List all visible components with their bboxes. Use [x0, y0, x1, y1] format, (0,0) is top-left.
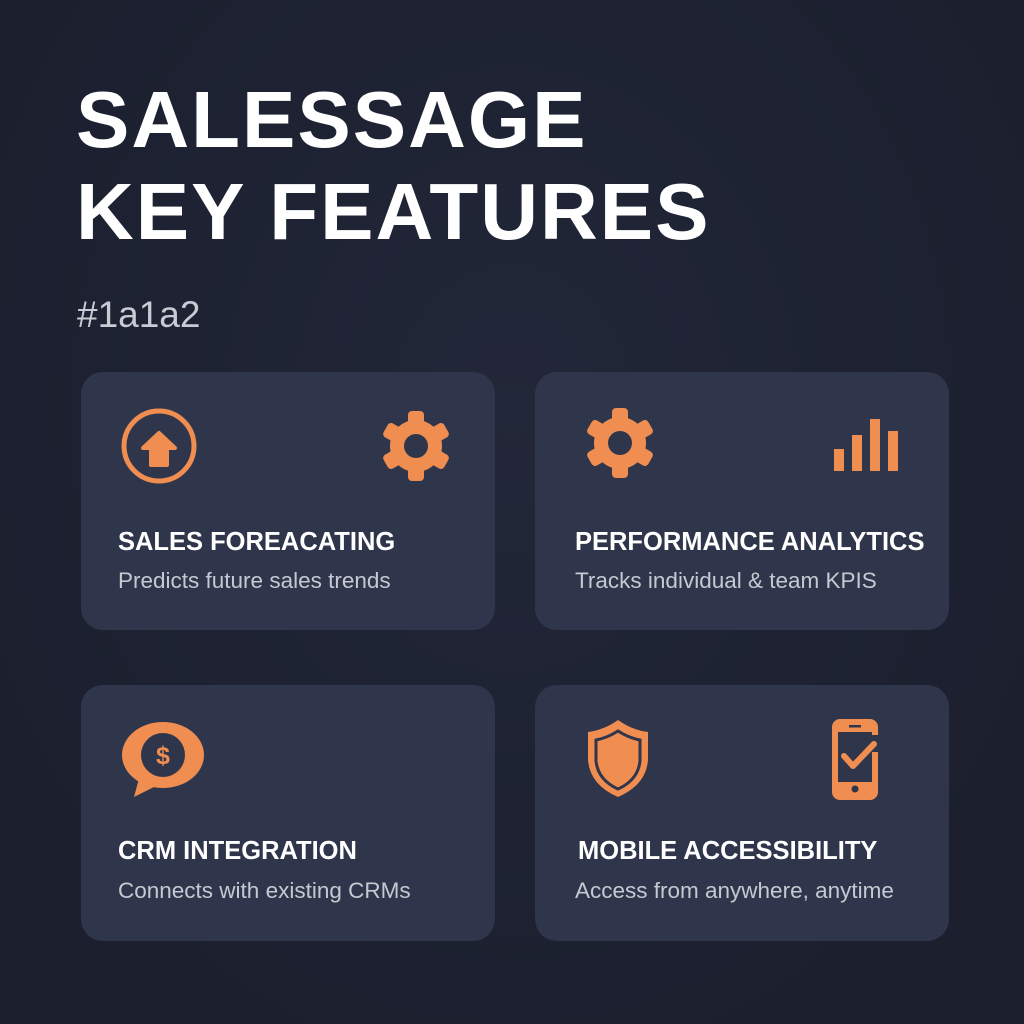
description: Predicts future sales trends [118, 568, 391, 593]
icon: gear [382, 411, 450, 481]
icon: shield [588, 720, 648, 797]
heading: SALES FOREACATING [118, 528, 395, 556]
title: SALESSAGE [76, 75, 587, 164]
description: Tracks individual & team KPIS [575, 568, 877, 593]
description: Access from anywhere, anytime [575, 878, 894, 903]
heading: MOBILE ACCESSIBILITY [578, 837, 877, 865]
subtitle: #1a1a2 [77, 294, 200, 335]
icon: bar chart [834, 419, 898, 471]
icon: phone check [835, 722, 880, 797]
description: Connects with existing CRMs [118, 878, 411, 903]
icon: gear 2 [586, 408, 654, 478]
heading: PERFORMANCE ANALYTICS [575, 528, 924, 556]
panel: sales forecasting [81, 372, 495, 630]
icon: speech bubble dollar: $ [156, 742, 170, 770]
panel: crm integration [81, 685, 495, 941]
icon: speech bubble dollar [122, 722, 204, 797]
title: KEY FEATURES [76, 167, 710, 256]
panel: performance analytics [535, 372, 949, 630]
title [76, 75, 710, 256]
icon: arrow up circle [124, 411, 194, 481]
panel: mobile accessibility [535, 685, 949, 941]
heading: CRM INTEGRATION [118, 837, 357, 865]
